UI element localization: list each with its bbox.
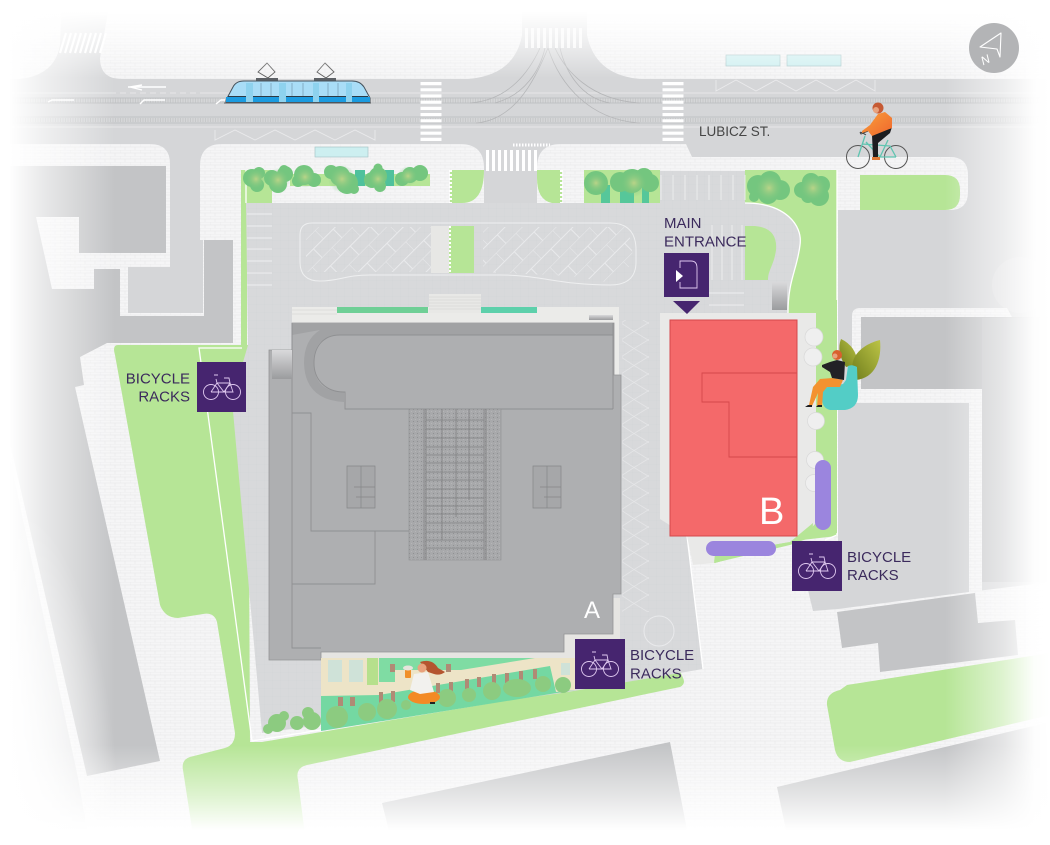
plant leaves bbox=[839, 339, 880, 380]
lubicz street roadway bbox=[0, 0, 1050, 611]
paved paths bbox=[321, 658, 575, 696]
east skylight bbox=[533, 466, 561, 508]
planting strip bbox=[367, 658, 378, 685]
large trees by parking bbox=[747, 171, 830, 206]
label: BICYCLE bbox=[630, 647, 694, 664]
rail bbox=[224, 102, 371, 104]
crosswalks bbox=[60, 33, 673, 160]
lawn: east bbox=[712, 170, 837, 563]
pale paving around building B bbox=[660, 313, 816, 565]
north arrow bbox=[980, 33, 1001, 57]
west skylight bbox=[347, 466, 375, 508]
compass bbox=[969, 23, 1019, 73]
garden lawn bbox=[379, 658, 535, 682]
green edge beside building B bbox=[813, 300, 837, 535]
terrace north of building A bbox=[292, 294, 619, 375]
trousers bbox=[809, 378, 843, 407]
bicycle frame bbox=[858, 136, 896, 157]
road markings and tram tracks bbox=[0, 48, 1050, 140]
shrubs bbox=[263, 676, 571, 734]
armchair bbox=[822, 365, 858, 410]
surrounding buildings left bbox=[0, 166, 233, 776]
label B: B bbox=[759, 491, 784, 533]
bicycle racks south bbox=[706, 541, 776, 556]
lawn: street strip bbox=[860, 175, 960, 210]
bus stop shelters bbox=[315, 55, 841, 157]
roof shading bbox=[292, 323, 613, 402]
lawn: south-east bbox=[827, 653, 1050, 762]
pantographs bbox=[258, 63, 334, 78]
roof equipment bbox=[256, 78, 336, 81]
callout: main entrance bbox=[664, 215, 747, 314]
head bbox=[832, 350, 842, 360]
callout: bicycle racks east bbox=[792, 541, 911, 591]
chevron parking beside building A bbox=[622, 320, 649, 612]
label: BICYCLE bbox=[126, 370, 190, 388]
lot boundary lines bbox=[199, 170, 837, 741]
green strip south of building B bbox=[714, 523, 813, 563]
posts bbox=[338, 664, 537, 706]
icon: bicycle bbox=[575, 639, 625, 689]
left side street bbox=[0, 412, 88, 835]
heading: MAIN bbox=[664, 215, 702, 232]
glazing bbox=[328, 660, 570, 682]
street label: LUBICZ ST. bbox=[699, 124, 770, 139]
green island by entrance bbox=[745, 226, 776, 280]
cyclist bbox=[846, 102, 908, 168]
label: RACKS bbox=[630, 666, 682, 682]
roof outlines bbox=[292, 323, 613, 648]
parking lot and courtyard ground bbox=[232, 171, 800, 733]
lawn: north-west strip bbox=[241, 170, 272, 345]
bicycle racks east bbox=[815, 460, 831, 530]
label: RACKS bbox=[847, 567, 899, 584]
shoe bbox=[872, 157, 880, 160]
label: RACKS bbox=[138, 388, 190, 406]
label A: A bbox=[584, 597, 600, 624]
callout: bicycle racks west bbox=[126, 362, 246, 412]
entry recess bbox=[272, 350, 292, 379]
pale walkway south of building A bbox=[321, 598, 620, 658]
parking bays bbox=[247, 175, 745, 305]
south garden bbox=[263, 658, 575, 734]
trees by main access bbox=[584, 168, 659, 203]
icon: bicycle bbox=[197, 362, 246, 412]
person sitting in garden bbox=[403, 661, 445, 704]
lower band bbox=[226, 97, 370, 102]
building B bbox=[670, 320, 797, 536]
ramp bbox=[772, 282, 787, 310]
row of trees north bbox=[243, 164, 430, 194]
label: BICYCLE bbox=[847, 549, 911, 566]
heading: ENTRANCE bbox=[664, 234, 747, 250]
building A bbox=[269, 323, 621, 660]
turning circle bbox=[644, 616, 674, 646]
handlebars bbox=[860, 131, 868, 135]
roof outline bbox=[702, 373, 797, 457]
callout: bicycle racks south bbox=[575, 639, 694, 689]
street-side green corners bbox=[449, 170, 660, 273]
white planters bbox=[804, 328, 824, 492]
lawn: west and south bbox=[114, 345, 684, 835]
icon: door bbox=[664, 253, 709, 297]
surrounding buildings right and south bbox=[382, 257, 1050, 835]
green hedge teeth bbox=[450, 170, 562, 273]
icon: bicycle bbox=[792, 541, 842, 591]
tram bbox=[224, 63, 371, 103]
tram body bbox=[226, 81, 370, 102]
doors bbox=[246, 83, 352, 102]
person sitting in armchair bbox=[805, 339, 880, 410]
window mullions bbox=[261, 83, 338, 96]
north letter: N bbox=[978, 52, 992, 68]
torso bbox=[862, 112, 892, 136]
head bbox=[872, 102, 884, 114]
parking island outline bbox=[300, 223, 636, 285]
central stair bbox=[409, 409, 501, 560]
trousers bbox=[872, 127, 892, 157]
shoes bbox=[805, 405, 822, 407]
arrow bbox=[673, 301, 700, 314]
jumper bbox=[822, 360, 845, 380]
